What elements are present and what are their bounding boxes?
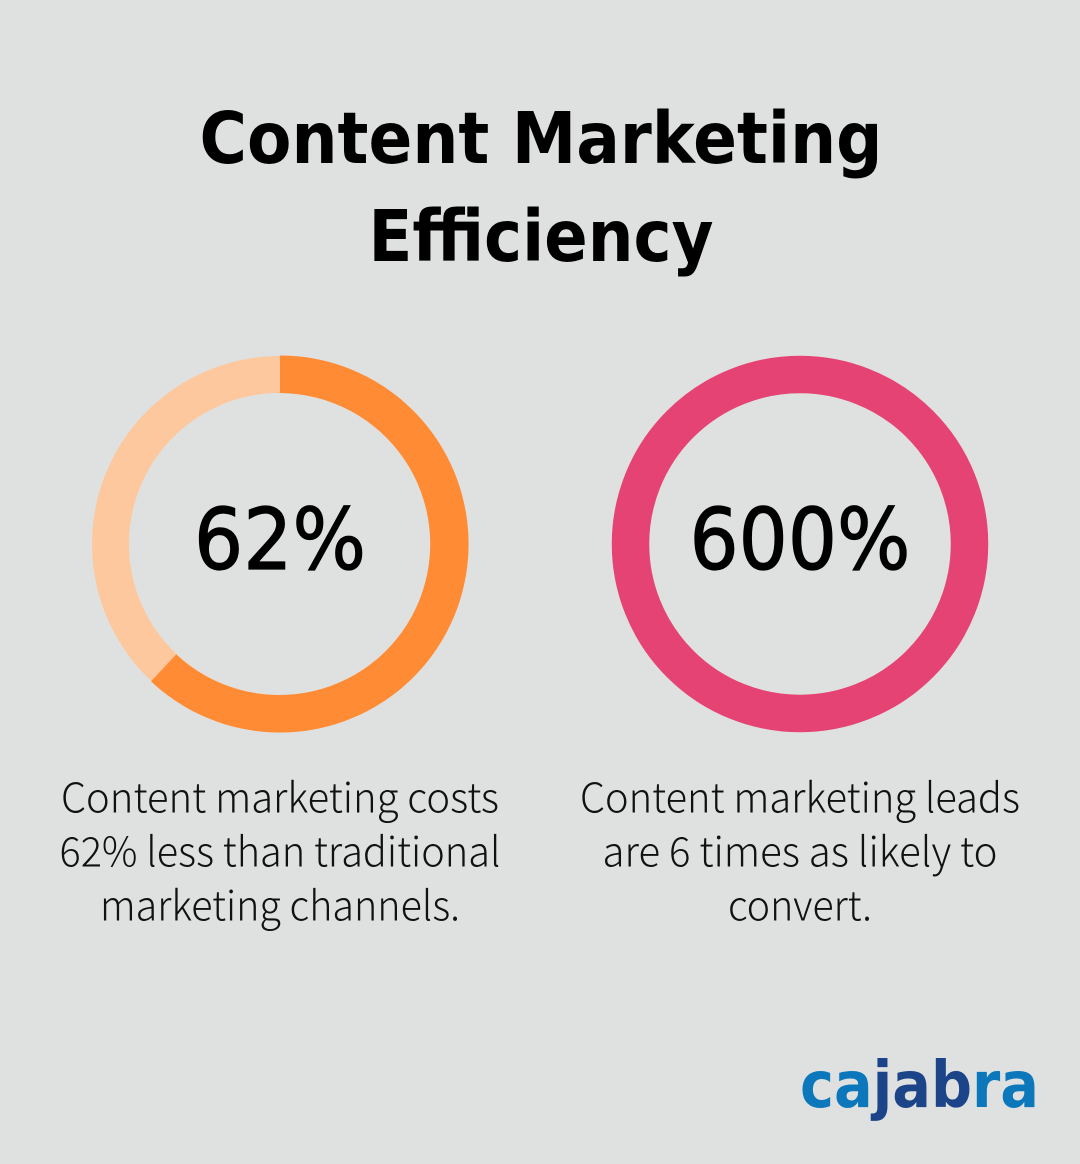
donut chart: 600% [630,374,970,714]
description: cost: 62% less than traditional [60,818,500,878]
description: leads: Content marketing leads [580,764,1020,824]
description: leads: convert. [728,872,872,932]
logo: cajabra: cajabra [800,1049,1039,1123]
title: Content Marketing [200,97,882,180]
description: cost: marketing channels. [100,872,460,932]
description: cost [60,764,500,932]
description: cost: Content marketing costs [61,764,499,824]
panel: 62% cost stat [60,356,500,932]
value: 62%: 62% [194,491,366,590]
title: Efficiency [368,195,714,278]
donut chart: 62% [110,356,469,732]
description: leads: are 6 times as likely to [602,818,998,878]
value: 600%: 600% [690,491,910,590]
title [200,97,882,278]
description: leads [580,764,1020,932]
panel: 600% leads stat [580,374,1020,932]
